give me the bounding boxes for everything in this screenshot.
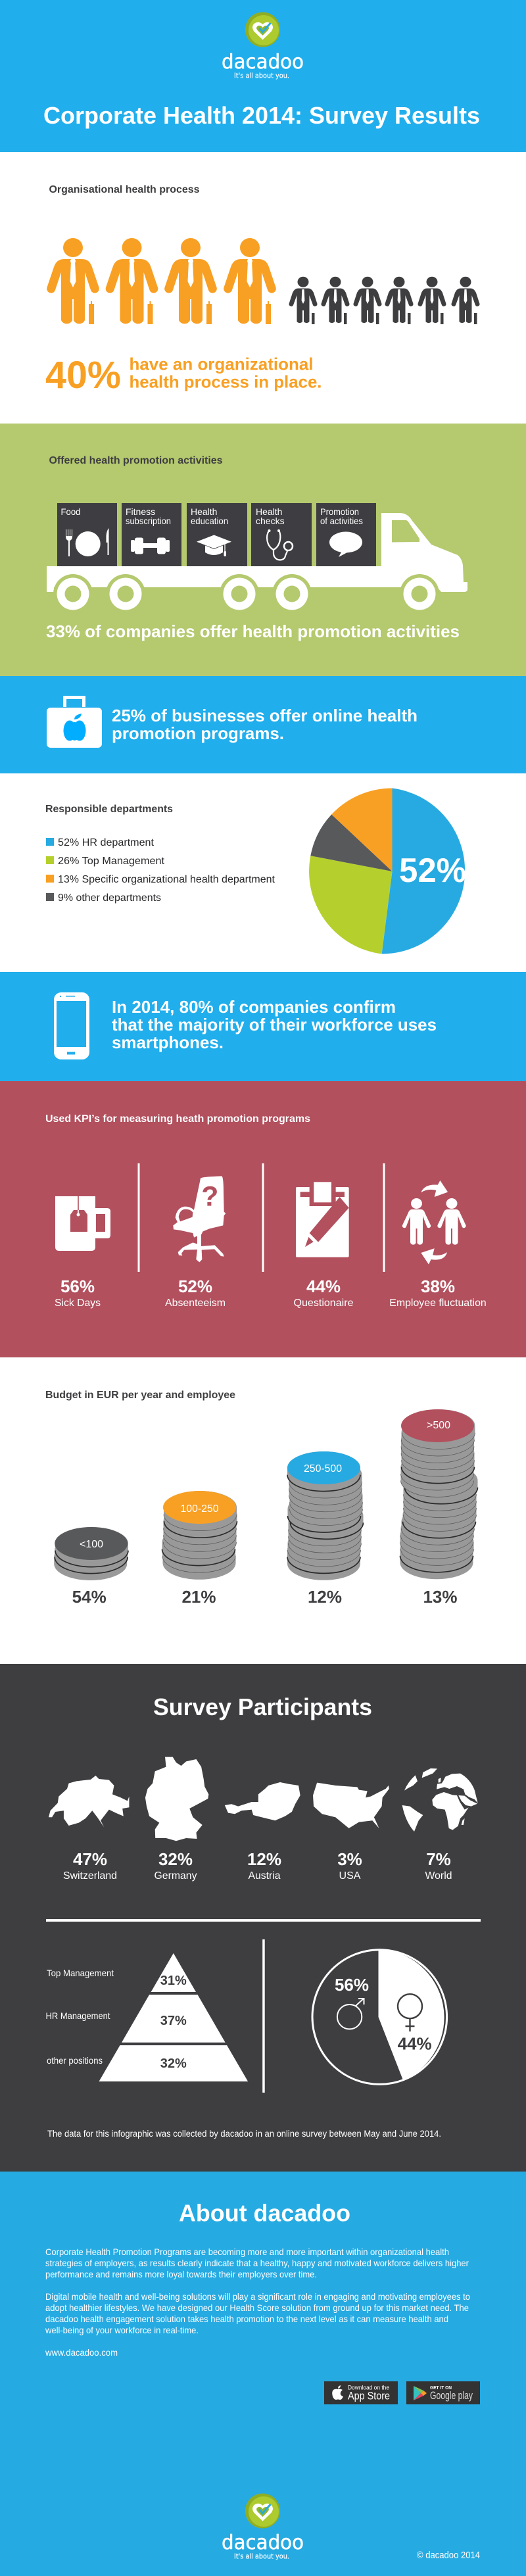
panel: responsible departments [0,773,526,972]
callout text [112,997,437,1052]
box: health checks [251,503,312,566]
pyramid chart: positions [46,1953,248,2081]
about text: well-being of your workforce in real-time. [45,2325,199,2335]
stat: employee fluctuation [389,1276,487,1309]
icon: tea mug [55,1196,110,1251]
icon: apple briefcase [47,697,102,748]
stat: sick days: 56% [60,1276,95,1296]
heading: Organisational health process [49,184,200,195]
panel: smartphones callout [0,972,526,1081]
stat: Switzerland: Switzerland [63,1870,117,1882]
badge: Google play: GET IT ON [430,2385,452,2391]
stat: Austria: 12% [247,1849,281,1869]
badge: Google play [406,2381,480,2404]
stat: sick days: Sick Days [55,1298,101,1309]
stat: USA: 3% [337,1849,362,1869]
legend [46,837,275,904]
stat: Austria [247,1849,281,1882]
stat: World: 7% [426,1849,451,1869]
box: promotion of activities: of activities [320,516,363,526]
stat: absenteeism: Absenteeism [165,1298,226,1309]
pie chart: 52% [399,852,466,890]
stat: employee fluctuation: 38% [421,1276,455,1296]
pyramid chart: positions: Top Management [47,1968,114,1978]
coin stack: 100-250 [162,1491,237,1580]
box: promotion of activities: Promotion [320,506,359,517]
pyramid chart: positions: 32% [160,2056,187,2071]
stat description: have an organizational [129,354,313,374]
box: food [57,503,117,566]
badge: App Store: Download on the [348,2385,389,2391]
stat description [129,354,322,392]
about text: performance and remains more loyal towards their employers over time. [45,2269,317,2279]
stat: World: World [425,1870,452,1882]
map: USA [313,1783,389,1828]
stat: absenteeism: 52% [178,1276,212,1296]
stat description: health process in place. [129,372,322,392]
box: health education: Health [191,506,217,517]
budget percentages [72,1587,458,1607]
legend: 9% other departments [58,892,161,904]
about text: strategies of employers, as results clearly indicate that a healthy, happy and motivated workforce delivers higher [45,2258,469,2268]
icon: office chair with question mark: ? [201,1180,218,1212]
stat text: 33% of companies offer health promotion activities [46,621,460,641]
icon: female symbol [398,1994,422,2031]
title: Corporate Health 2014: Survey Results [43,102,480,129]
badge: App Store [324,2381,398,2404]
callout text: that the majority of their workforce uses [112,1015,437,1034]
callout text: smartphones. [112,1033,224,1052]
gender pie chart [312,1949,447,2084]
heading: Responsible departments [45,804,173,815]
box: fitness subscription: Fitness [126,506,155,517]
stat: USA: USA [339,1870,361,1882]
icon: questionnaire clipboard [296,1179,349,1257]
icon: employee fluctuation [402,1180,466,1265]
about text: dacadoo health engagement solution takes health promotion to the next level as it can measure health and [45,2314,448,2324]
box: health education [187,503,247,566]
coin stack: over 500: >500 [427,1420,450,1431]
footer logo wordmark: dacadoo [222,2531,304,2554]
stat: Germany [154,1849,197,1882]
logo wordmark: dacadoo [222,51,304,74]
budget percentages: 54% [72,1587,107,1607]
panel: online programs callout [0,676,526,773]
stat: absenteeism [165,1276,226,1309]
legend: 13% Specific organizational health department [58,874,275,885]
icon: truck [47,513,467,614]
pyramid chart: positions: 37% [160,2014,187,2028]
heading: Budget in EUR per year and employee [45,1390,235,1401]
stat: questionnaire [293,1276,354,1309]
box: health checks: Health [256,506,282,517]
icon: six grey employees [289,277,480,324]
coin stack: 250-500: 250-500 [304,1463,342,1474]
panel: organisational health process [0,152,526,424]
copyright: © dacadoo 2014 [417,2550,480,2561]
legend: 52% HR department [58,837,155,848]
stat: questionnaire: Questionaire [293,1298,354,1309]
map: Germany [145,1757,208,1841]
callout text: 25% of businesses offer online health [112,706,418,725]
budget percentages: 21% [181,1587,216,1607]
logo tagline: It's all about you. [234,72,289,80]
callout text: promotion programs. [112,723,284,743]
big stat 40%: 40% [45,354,121,397]
about text: www.dacadoo.com [45,2347,118,2358]
box: fitness subscription: subscription [126,516,171,526]
box: fitness subscription [122,503,181,566]
icon: footer dacadoo logo [245,2494,280,2528]
header band [0,0,526,152]
about text [45,2247,470,2358]
panel: KPIs [0,1081,526,1357]
coin stack: 100-250: 100-250 [180,1503,219,1515]
legend: 26% Top Management [58,856,165,867]
stat: Germany: Germany [154,1870,197,1882]
icon: four orange employees [47,238,276,324]
icon: office chair with question mark [173,1176,226,1262]
coin stack: over 500 [400,1409,477,1579]
map: Switzerland [49,1776,129,1827]
coin stack: under 100 [54,1527,128,1580]
panel: offered health promotion activities [0,424,526,676]
callout text: In 2014, 80% of companies confirm [112,997,396,1017]
badge: Google play: Google play [430,2389,473,2402]
callout text [112,706,418,743]
stat: sick days [55,1276,101,1309]
badge: App Store: App Store [348,2390,390,2402]
stat: questionnaire: 44% [306,1276,341,1296]
data source note: The data for this infographic was collected by dacadoo in an online survey between May and June 2014. [47,2128,441,2139]
about text: Corporate Health Promotion Programs are becoming more and more important within organizational health [45,2247,449,2257]
stat: employee fluctuation: Employee fluctuation [389,1298,487,1309]
pyramid chart: positions: HR Management [46,2010,110,2021]
budget percentages: 12% [308,1587,342,1607]
stat: Austria: Austria [249,1870,281,1882]
box: health education: education [191,516,228,526]
about text: Digital mobile health and well-being solutions will play a significant role in engaging and motivating employees to [45,2291,470,2302]
stat: Switzerland [63,1849,117,1882]
heading: Used KPI’s for measuring heath promotion programs [45,1113,310,1125]
pyramid chart: positions: 31% [160,1974,187,1988]
box: health checks: checks [256,516,285,526]
budget percentages: 13% [423,1587,458,1607]
heading: Survey Participants [153,1693,372,1720]
box: promotion of activities [316,503,376,566]
pyramid chart: positions: other positions [47,2055,103,2066]
icon: smartphone [54,992,89,1059]
map: world globe [402,1768,478,1832]
heading: About dacadoo [179,2199,350,2227]
gender pie chart: 44% [398,2034,432,2054]
stat: USA [337,1849,362,1882]
gender pie chart: 56% [335,1975,369,1995]
coin stack: under 100: <100 [80,1539,103,1550]
coin stack: 250-500 [287,1451,363,1580]
icon: male symbol [337,1999,364,2029]
stat: World [425,1849,452,1882]
pie chart [309,788,466,954]
about text: adopt healthier lifestyles. We have designed our Health Score solution from ground up for this market need. The [45,2302,469,2313]
stat: Germany: 32% [158,1849,193,1869]
panel: about dacadoo [0,2172,526,2576]
icon: dacadoo logo [245,12,280,47]
footer logo tagline: It's all about you. [234,2553,289,2561]
heading: Offered health promotion activities [49,455,223,466]
box: food: Food [60,506,80,517]
stat: Switzerland: 47% [73,1849,107,1869]
map: Austria [225,1782,300,1820]
panel: budget [0,1357,526,1664]
panel: survey participants [0,1664,526,2172]
